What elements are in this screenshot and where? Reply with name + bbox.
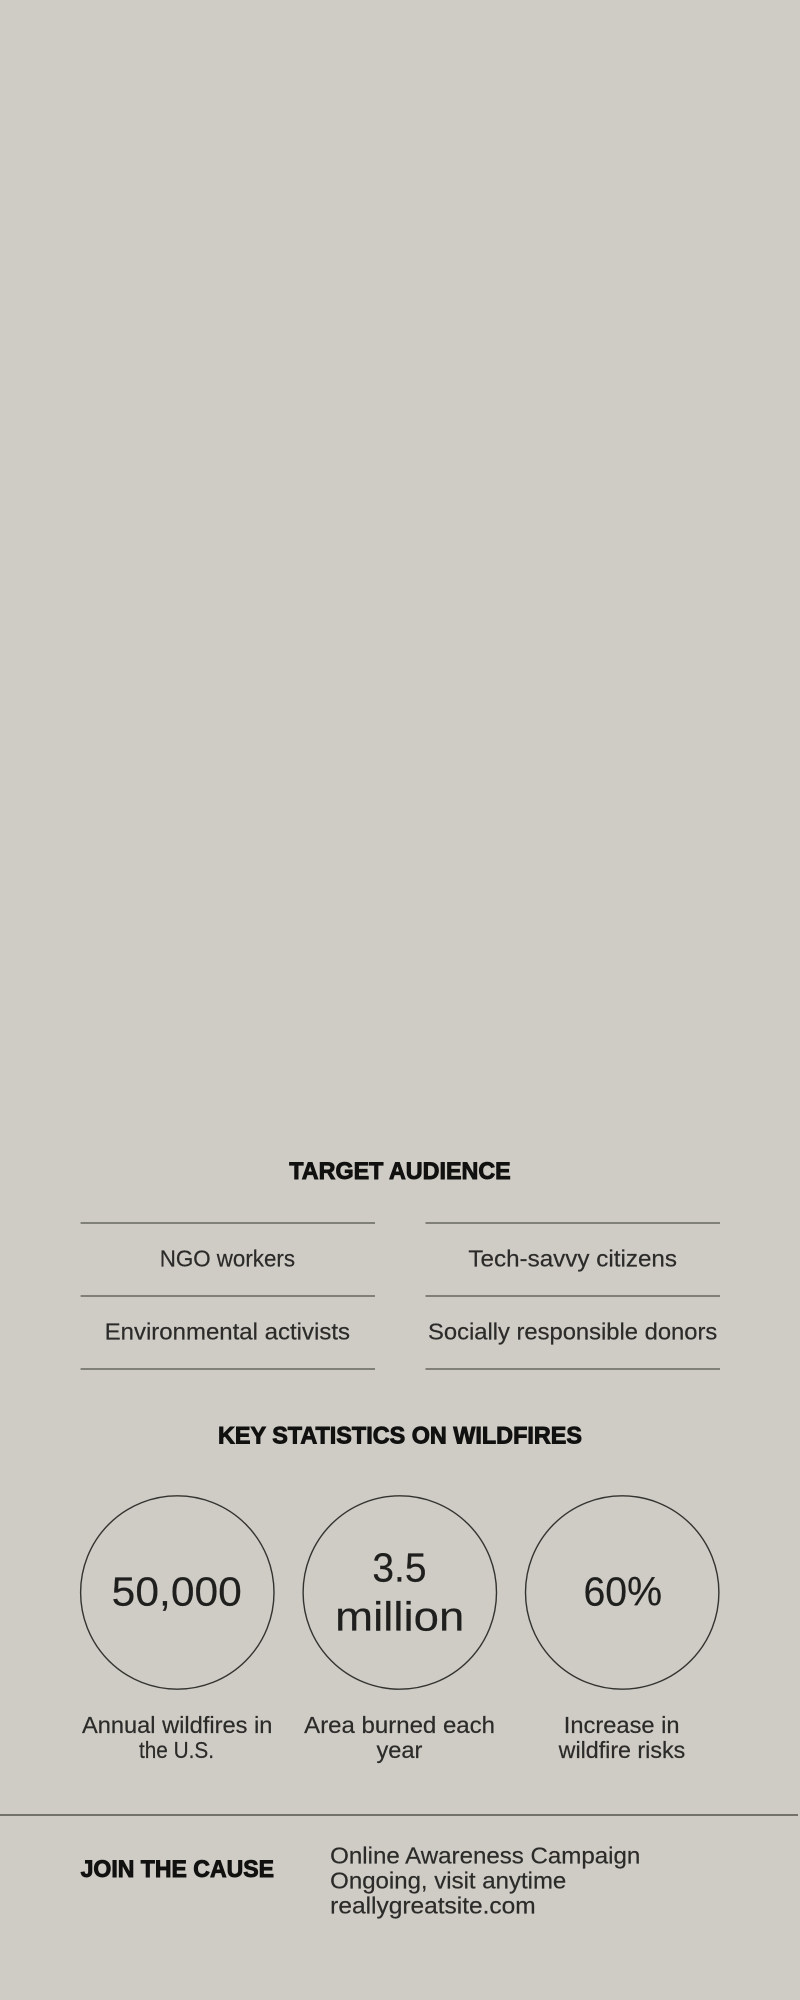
stat caption: Area burned each [304, 1712, 495, 1738]
campaign details: Ongoing, visit anytime [330, 1867, 566, 1893]
stat value: 60% [584, 1569, 662, 1615]
campaign details [330, 1843, 640, 1918]
stat caption: Annual wildfires in [82, 1712, 272, 1738]
heading: join the cause: JOIN THE CAUSE [81, 1856, 274, 1883]
audience: socially responsible donors: Socially responsible donors [428, 1319, 717, 1345]
stat circle [81, 1496, 274, 1689]
stat caption: wildfire risks [558, 1737, 685, 1763]
heading: target audience: TARGET AUDIENCE [289, 1158, 511, 1185]
stat caption: year [376, 1737, 423, 1763]
stat circle [526, 1496, 719, 1689]
stat value: 3.5 [372, 1545, 426, 1591]
stat caption [558, 1712, 685, 1763]
stat: area burned [303, 1496, 496, 1763]
campaign details: reallygreatsite.com [330, 1892, 536, 1918]
stat caption [82, 1712, 272, 1763]
heading: key statistics on wildfires: KEY STATISTICS ON WILDFIRES [218, 1423, 582, 1450]
stat value: million [335, 1594, 464, 1640]
stat caption: the U.S. [139, 1737, 214, 1763]
stat: wildfire risk increase [526, 1496, 719, 1763]
campaign details: Online Awareness Campaign [330, 1843, 640, 1869]
stat: annual wildfires [81, 1496, 274, 1763]
audience: environmental activists: Environmental activists [105, 1319, 350, 1345]
stat value [335, 1545, 464, 1640]
stat caption: Increase in [564, 1712, 680, 1738]
panel: call to action [81, 1843, 640, 1918]
audience: tech-savvy citizens: Tech-savvy citizens [468, 1246, 677, 1272]
stat caption [304, 1712, 495, 1763]
audience: NGO workers: NGO workers [160, 1246, 295, 1272]
stat circle [303, 1496, 496, 1689]
panel: key statistics [81, 1423, 719, 1763]
stat value: 50,000 [112, 1569, 242, 1615]
panel: target audience [81, 1158, 720, 1369]
